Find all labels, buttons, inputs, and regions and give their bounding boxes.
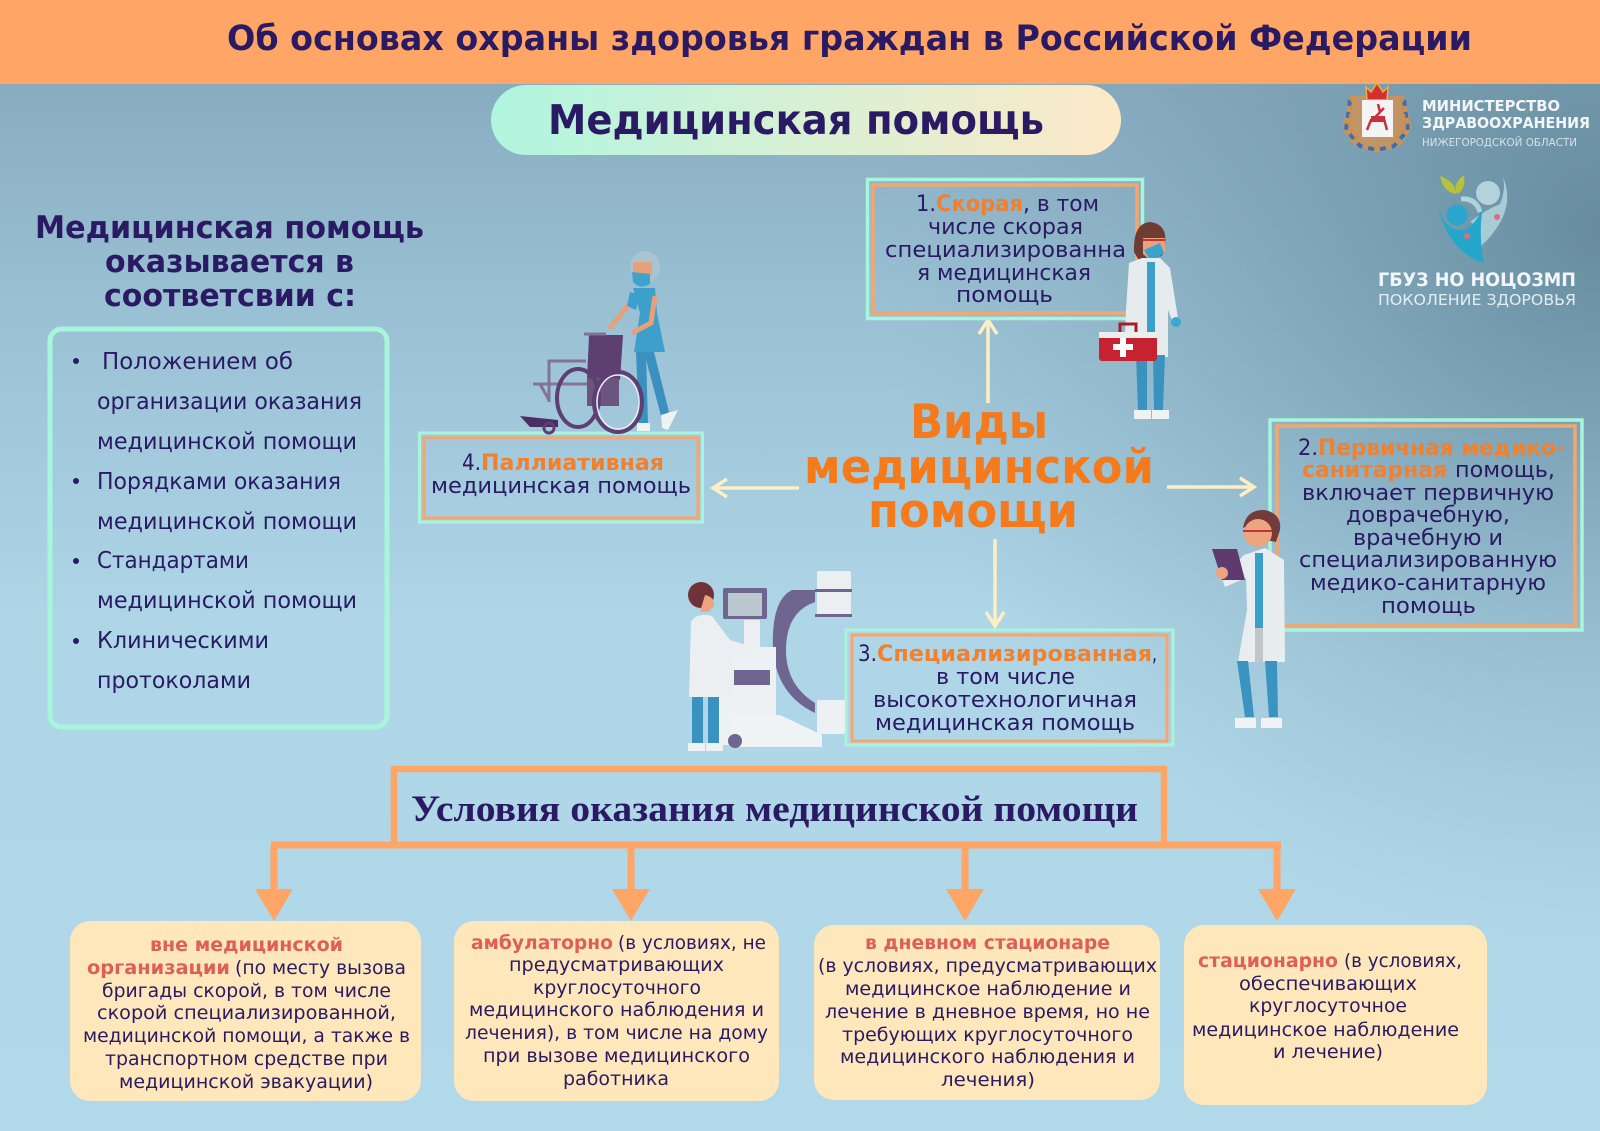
card: outpatient: при вызове медицинского: [483, 1045, 750, 1067]
panel: type 2 primary: доврачебную,: [1346, 503, 1510, 528]
logo: ministry of health: ЗДРАВООХРАНЕНИЯ: [1422, 114, 1590, 132]
icon: coat of arms: [1342, 83, 1412, 153]
panel: type 3 specialised: 3.: [858, 642, 877, 667]
panel: type 1 emergency: [868, 180, 1142, 318]
card: day hospital: лечение в дневное время, но не: [825, 1001, 1150, 1023]
illustration: doctor with first-aid kit: [1099, 222, 1181, 419]
icon: mother and child: [1437, 175, 1507, 263]
illustration: doctor with tablet: [1212, 510, 1285, 728]
card: outpatient: медицинского наблюдения и: [469, 999, 764, 1021]
central heading: [804, 395, 1154, 539]
connector with arrows: [255, 845, 1296, 921]
panel: type 3 specialised: [846, 630, 1173, 745]
heading: conditions of care: [394, 769, 1164, 845]
panel: type 3 specialised: ,: [1152, 642, 1157, 667]
panel: type 3 specialised: Специализированная: [877, 642, 1152, 667]
panel: type 1 emergency: я медицинская: [917, 261, 1091, 286]
card: outside medical organisation: вне медицинской: [150, 934, 343, 956]
logo: ministry of health: МИНИСТЕРСТВО: [1422, 97, 1560, 115]
card: day hospital: требующих круглосуточного: [842, 1024, 1133, 1046]
panel: type 2 primary: медико-санитарную: [1310, 571, 1546, 596]
arrow: right to primary care: [1167, 478, 1254, 496]
panel: type 3 specialised: медицинская помощь: [875, 711, 1135, 736]
panel: type 2 primary: 2.: [1298, 436, 1318, 461]
panel: standards list: организации оказания: [97, 389, 362, 415]
card: inpatient: и лечение): [1273, 1041, 1383, 1063]
panel: type 1 emergency: , в том: [1023, 192, 1099, 217]
card: day hospital: [814, 925, 1160, 1100]
arrow: left to palliative care: [713, 479, 799, 497]
panel: type 1 emergency: специализированна: [885, 238, 1126, 263]
card: outpatient: работника: [563, 1068, 669, 1090]
card: inpatient: стационарно: [1198, 950, 1338, 972]
panel: standards list: протоколами: [97, 668, 251, 694]
logo: GBUZ NOCOZMP: ГБУЗ НО НОЦОЗМП: [1378, 269, 1576, 291]
logo: ministry of health: НИЖЕГОРОДСКОЙ ОБЛАСТИ: [1422, 136, 1577, 149]
panel: type 4 palliative: медицинская помощь: [431, 474, 691, 499]
card: inpatient: круглосуточное: [1249, 995, 1407, 1017]
card: day hospital: лечения): [941, 1069, 1035, 1091]
panel: standards list: [50, 329, 387, 727]
panel: type 1 emergency: Скорая: [936, 192, 1023, 217]
illustration: nurse with wheelchair: [520, 251, 678, 433]
logo: GBUZ NOCOZMP: ПОКОЛЕНИЕ ЗДОРОВЬЯ: [1378, 291, 1576, 309]
central heading: Виды: [910, 395, 1048, 450]
panel: type 2 primary: санитарная: [1302, 458, 1447, 483]
panel: type 3 specialised: высокотехнологичная: [873, 688, 1137, 713]
panel: type 2 primary: помощь: [1381, 594, 1476, 619]
card: outside medical organisation: организации: [87, 957, 230, 979]
heading: conditions of care: Условия оказания медицинской помощи: [411, 789, 1138, 830]
logo: GBUZ NOCOZMP: [1378, 175, 1576, 309]
central heading: помощи: [868, 484, 1078, 539]
panel: type 1 emergency: помощь: [956, 283, 1053, 308]
card: day hospital: медицинское наблюдение и: [845, 978, 1131, 1000]
left heading: оказывается в: [105, 244, 354, 280]
panel: type 3 specialised: в том числе: [936, 665, 1075, 690]
card: day hospital: в дневном стационаре: [865, 932, 1110, 954]
panel: type 1 emergency: числе скорая: [928, 215, 1083, 240]
card: outpatient: амбулаторно: [471, 932, 613, 954]
left heading: Медицинская помощь: [35, 210, 424, 246]
card: outside medical organisation: бригады скорой, в том числе: [102, 980, 391, 1002]
panel: standards list: Клиническими: [97, 628, 269, 654]
illustration: technician and C-arm machine: [688, 571, 852, 751]
card: outpatient: (в условиях, не: [618, 932, 766, 954]
panel: type 4 palliative: [420, 433, 702, 522]
arrow: down to specialised care: [986, 539, 1004, 626]
panel: standards list: Положением об: [102, 349, 293, 375]
arrow: up to emergency care: [979, 320, 997, 403]
panel: standards list: Стандартами: [97, 548, 249, 574]
panel: standards list: Порядками оказания: [97, 469, 341, 495]
panel: type 1 emergency: 1.: [916, 192, 936, 217]
panel: type 2 primary: специализированную: [1299, 548, 1557, 573]
panel: type 4 palliative: 4.: [462, 451, 481, 476]
panel: type 2 primary: [1270, 420, 1582, 630]
header band: [0, 0, 1600, 84]
central heading: медицинской: [804, 440, 1154, 495]
card: outpatient: [454, 921, 779, 1101]
card: outside medical organisation: [70, 921, 421, 1101]
panel: standards list: медицинской помощи: [97, 588, 357, 614]
card: outpatient: предусматривающих: [509, 954, 724, 976]
card: outside medical organisation: медицинской помощи, а также в: [83, 1025, 410, 1047]
card: day hospital: медицинского наблюдения и: [840, 1046, 1135, 1068]
card: outpatient: круглосуточного: [533, 977, 701, 999]
card: day hospital: (в условиях, предусматривающих: [818, 955, 1157, 977]
left heading: соответсвии с:: [104, 278, 356, 314]
panel: standards list: медицинской помощи: [97, 509, 357, 535]
subtitle pill: Медицинская помощь: [548, 96, 1044, 144]
card: inpatient: [1184, 925, 1487, 1105]
panel: type 4 palliative: Паллиативная: [481, 451, 664, 476]
card: outside medical organisation: скорой специализированной,: [97, 1002, 396, 1024]
panel: type 2 primary: врачебную и: [1353, 526, 1503, 551]
card: outside medical organisation: медицинской эвакуации): [119, 1071, 373, 1093]
subtitle pill: [491, 85, 1121, 155]
panel: type 2 primary: включает первичную: [1302, 481, 1554, 506]
card: inpatient: (в условиях,: [1344, 950, 1462, 972]
title: Об основах охраны здоровья граждан в Российской Федерации: [227, 19, 1472, 59]
left heading: [35, 210, 424, 314]
card: inpatient: медицинское наблюдение: [1192, 1019, 1459, 1041]
card: inpatient: обеспечивающих: [1239, 973, 1417, 995]
card: outpatient: лечения), в том числе на дому: [465, 1022, 768, 1044]
card: outside medical organisation: транспортном средстве при: [105, 1048, 388, 1070]
card: outside medical organisation: (по месту вызова: [235, 957, 406, 979]
panel: type 2 primary: Первичная медико-: [1318, 436, 1565, 461]
panel: type 2 primary: помощь,: [1455, 458, 1555, 483]
logo: ministry of health: [1342, 83, 1590, 153]
panel: standards list: медицинской помощи: [97, 429, 357, 455]
